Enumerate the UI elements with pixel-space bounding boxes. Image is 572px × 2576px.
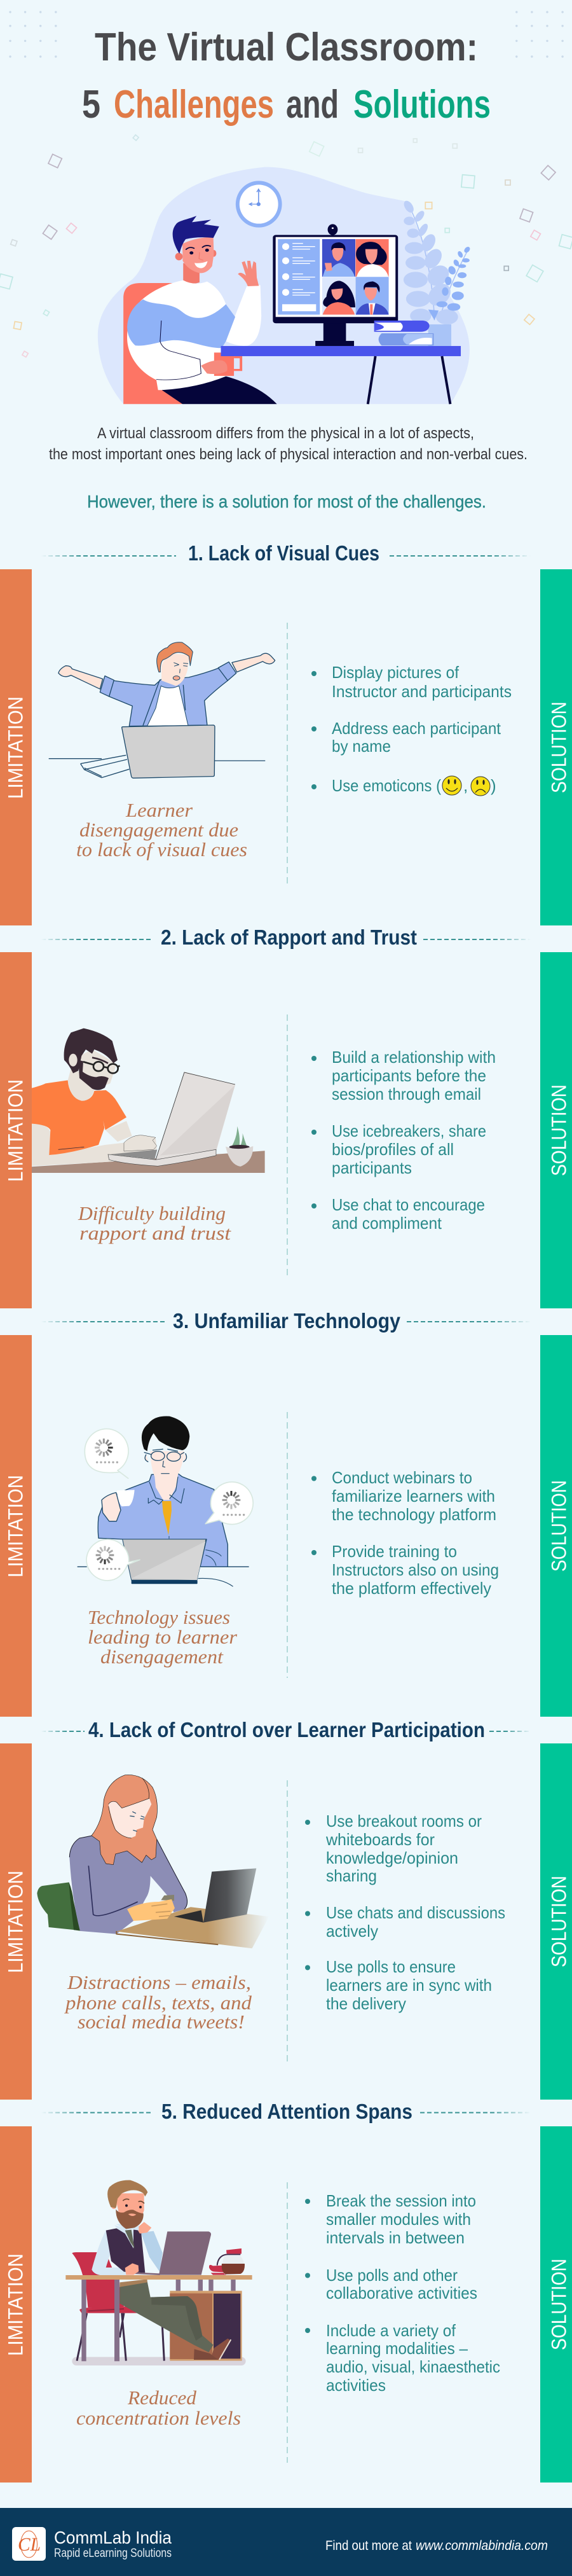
solution list	[305, 1811, 505, 2013]
limitation bar	[0, 2126, 32, 2483]
video tile 4	[355, 277, 389, 315]
solution list: Use icebreakers, share	[332, 1121, 486, 1140]
solution list: the platform effectively	[332, 1579, 491, 1598]
limitation bar	[0, 569, 32, 925]
coffee mug and hand	[201, 352, 241, 376]
heading 5: 5. Reduced Attention Spans	[161, 2100, 412, 2123]
solution list: familiarize learners with	[332, 1486, 495, 1506]
caption	[76, 799, 247, 861]
solution list: sharing	[326, 1866, 377, 1885]
solution list: by name	[332, 737, 391, 756]
trousers	[162, 377, 277, 404]
heading 2: 2. Lack of Rapport and Trust	[161, 925, 417, 949]
caption: concentration levels	[76, 2407, 241, 2429]
company name: CommLab India	[54, 2528, 172, 2547]
solution list: actively	[326, 1922, 378, 1941]
background blob	[98, 167, 470, 404]
tagline: Rapid eLearning Solutions	[54, 2547, 172, 2560]
heading 1: 1. Lack of Visual Cues	[188, 541, 379, 565]
solution bar: SOLUTION	[548, 1876, 571, 1967]
title line 2: Challenges	[114, 83, 274, 127]
solution list: Instructor and participants	[332, 682, 512, 701]
solution list: participants before the	[332, 1066, 486, 1085]
solution list: Use polls to ensure	[326, 1957, 456, 1976]
logo: CL	[18, 2534, 41, 2555]
solution list	[305, 2191, 500, 2395]
limitation bar: LIMITATION	[4, 1475, 27, 1577]
chair	[123, 283, 182, 404]
solution list: Use chat to encourage	[332, 1195, 485, 1214]
solution list: )	[491, 776, 496, 795]
caption: Learner	[125, 799, 193, 821]
section 4: Lack of Control over Learner Participation	[0, 1718, 572, 2100]
solution list: Address each participant	[332, 719, 501, 738]
raised arm	[226, 261, 261, 346]
caption: social media tweets!	[78, 2011, 245, 2033]
heading 4: 4. Lack of Control over Learner Participation	[88, 1718, 485, 1742]
title line 2: 5	[82, 83, 100, 127]
icon: smiley	[442, 776, 461, 795]
solution list: Break the session into	[326, 2191, 476, 2210]
solution bar	[540, 1743, 572, 2100]
sweater	[127, 280, 235, 390]
solution list: collaborative activities	[326, 2283, 477, 2302]
limitation bar: LIMITATION	[4, 1871, 27, 1973]
caption: to lack of visual cues	[76, 838, 247, 861]
illustration: woman on phone at desk	[37, 1775, 269, 1948]
website call to action: Find out more at	[325, 2538, 412, 2553]
plant	[402, 200, 471, 346]
solution list: audio, visual, kinaesthetic	[326, 2357, 500, 2376]
wall clock	[236, 181, 282, 228]
solution bar: SOLUTION	[548, 1084, 571, 1176]
logo	[12, 2527, 46, 2561]
solution list: the delivery	[326, 1994, 406, 2013]
heading 2	[41, 925, 531, 949]
caption: Distractions – emails,	[67, 1971, 251, 1993]
chat panel	[278, 239, 320, 315]
solution list	[311, 1048, 496, 1233]
heading 3: 3. Unfamiliar Technology	[173, 1309, 401, 1333]
solution list: Provide training to	[332, 1542, 457, 1561]
solution list: whiteboards for	[325, 1830, 435, 1849]
limitation bar	[0, 1743, 32, 2100]
head	[173, 216, 219, 273]
website call to action	[325, 2538, 548, 2553]
caption: Technology issues	[88, 1606, 230, 1628]
section 3: Unfamiliar Technology	[0, 1309, 572, 1717]
title line 2: and	[286, 83, 339, 127]
illustration: bearded man at desk	[65, 2180, 252, 2365]
solution bar	[540, 1335, 572, 1717]
limitation bar	[0, 952, 32, 1308]
section 5: Reduced Attention Spans	[0, 2100, 572, 2483]
caption	[88, 1606, 238, 1668]
solution bar: SOLUTION	[548, 1480, 571, 1572]
solution list: session through email	[332, 1084, 481, 1104]
solution list: Use polls and other	[326, 2266, 458, 2285]
video tile 1	[322, 239, 355, 277]
loading bubble 1	[85, 1429, 128, 1478]
limitation bar: LIMITATION	[4, 2254, 27, 2356]
title line 1: The Virtual Classroom:	[95, 25, 478, 69]
video tile 3	[322, 277, 355, 315]
caption: Difficulty building	[78, 1202, 226, 1224]
solution list: learning modalities –	[326, 2339, 468, 2358]
section 2: Lack of Rapport and Trust	[0, 925, 572, 1308]
solution list: Display pictures of	[332, 663, 460, 682]
solution list: learners are in sync with	[326, 1976, 492, 1995]
video tile 2	[355, 239, 389, 277]
highlighted statement: However, there is a solution for most of the challenges.	[87, 492, 486, 511]
caption: leading to learner	[88, 1626, 238, 1648]
loading bubble 2	[205, 1482, 253, 1525]
title	[82, 25, 491, 127]
icon: frowny	[471, 777, 490, 796]
solution bar	[540, 569, 572, 925]
books	[374, 321, 433, 345]
solution bar: SOLUTION	[548, 2259, 571, 2350]
intro paragraph: A virtual classroom differs from the physical in a lot of aspects,	[97, 425, 474, 442]
solution list: Build a relationship with	[332, 1048, 496, 1067]
caption	[78, 1202, 232, 1244]
solution list: Use breakout rooms or	[326, 1811, 482, 1831]
heading 3	[41, 1309, 531, 1333]
solution list: Conduct webinars to	[332, 1468, 472, 1487]
limitation bar	[0, 1335, 32, 1717]
solution list: intervals in between	[326, 2228, 465, 2247]
solution list: the technology platform	[332, 1505, 496, 1524]
solution list: Include a variety of	[326, 2321, 456, 2340]
desk	[221, 346, 461, 404]
solution list: Use emoticons (	[332, 776, 441, 795]
heading 5	[41, 2100, 531, 2123]
caption: Reduced	[127, 2386, 197, 2409]
neck	[183, 263, 200, 284]
caption: rapport and trust	[79, 1222, 232, 1244]
limitation bar: LIMITATION	[4, 696, 27, 799]
section 1: Lack of Visual Cues	[0, 541, 572, 925]
title line 2: Solutions	[353, 83, 491, 127]
solution list	[311, 663, 512, 796]
solution list: activities	[326, 2376, 386, 2395]
solution bar	[540, 2126, 572, 2483]
limitation bar: LIMITATION	[4, 1079, 27, 1182]
solution list: bios/profiles of all	[332, 1140, 454, 1159]
solution list: ,	[463, 776, 468, 795]
caption	[76, 2386, 241, 2429]
illustration: yawning learner at laptop	[49, 642, 275, 778]
solution list: smaller modules with	[326, 2210, 471, 2229]
solution bar: SOLUTION	[548, 702, 571, 793]
footer	[0, 2508, 572, 2576]
solution list: Use chats and discussions	[326, 1903, 505, 1922]
loading bubble 3	[86, 1539, 140, 1581]
monitor and webcam	[273, 224, 398, 346]
illustration: bearded man typing	[32, 1028, 265, 1173]
caption	[64, 1971, 252, 2033]
heading 1	[41, 541, 531, 565]
intro paragraph: the most important ones being lack of physical interaction and non-verbal cues.	[49, 446, 528, 463]
solution list: and compliment	[332, 1214, 442, 1233]
caption: disengagement	[100, 1645, 224, 1668]
solution list	[311, 1468, 499, 1598]
intro paragraph	[49, 425, 528, 463]
illustration: man with glasses waiting for loading spinners	[78, 1416, 253, 1586]
hero illustration: man in video call	[98, 167, 471, 404]
solution list: knowledge/opinion	[326, 1848, 458, 1867]
caption: phone calls, texts, and	[64, 1991, 252, 2014]
solution list: Instructors also on using	[332, 1560, 499, 1579]
caption: disengagement due	[79, 819, 238, 841]
website call to action: www.commlabindia.com	[416, 2538, 548, 2553]
title line 2	[82, 83, 491, 127]
solution list: participants	[332, 1158, 412, 1177]
solution bar	[540, 952, 572, 1308]
